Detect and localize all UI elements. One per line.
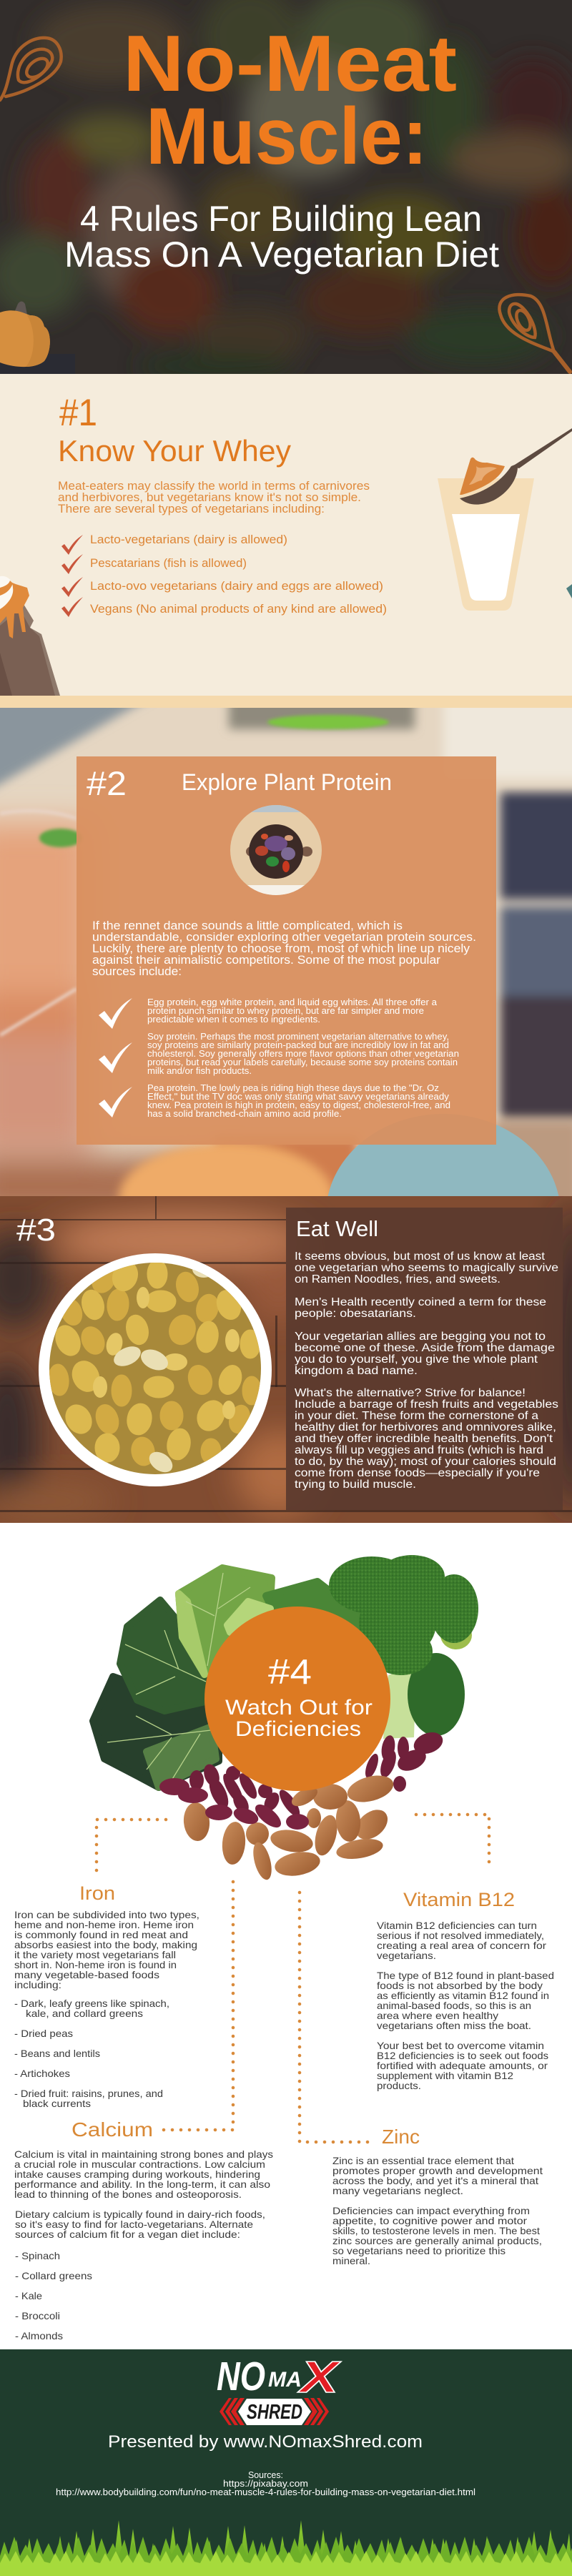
protein sources list: Effect," but the TV doc was only stating what savvy vegetarians already xyxy=(147,1091,450,1102)
zinc heading: Zinc xyxy=(382,2126,420,2148)
iron text xyxy=(14,1909,199,2109)
vitamin b12 text: fortified with adequate amounts, or xyxy=(377,2060,548,2071)
zinc text: skills, to testosterone levels in men. The best xyxy=(332,2225,540,2236)
zinc text: many vegetarians neglect. xyxy=(332,2185,463,2196)
sources: http://www.bodybuilding.com/fun/no-meat-muscle-4-rules-for-building-mass-on-vegetarian-diet.html xyxy=(56,2487,475,2497)
food collage xyxy=(93,1555,478,1882)
rule 1 heading: Know Your Whey xyxy=(58,434,291,468)
calcium text: performance and ability. In the long-term, it can also xyxy=(14,2178,270,2190)
rule 1 intro text xyxy=(58,480,370,515)
rule 4 number: #4 xyxy=(268,1653,312,1692)
white background xyxy=(0,1523,572,2349)
subtitle xyxy=(64,199,499,275)
vitamin b12 text: B12 deficiencies is to seek out foods xyxy=(377,2050,548,2061)
calcium text: - Collard greens xyxy=(15,2270,92,2281)
rule 4 heading xyxy=(225,1696,373,1741)
rule 3 body text: on Ramen Noodles, fries, and sweets. xyxy=(295,1273,500,1285)
kidney beans xyxy=(189,1729,446,1820)
blue egg xyxy=(327,1125,559,1196)
rule 2 orange panel xyxy=(77,756,496,1145)
zinc text xyxy=(332,2155,543,2266)
red check marks xyxy=(61,535,83,617)
rule 3 heading: Eat Well xyxy=(296,1216,378,1241)
panel: rule 3 eat well xyxy=(0,1196,572,1523)
protein sources list: protein punch similar to whey protein, but are far simpler and more xyxy=(147,1005,424,1016)
calcium text: so it's easy to find for lacto-vegetarians. Alternate xyxy=(15,2219,253,2230)
rule 3 body text: become one of these. Aside from the damage xyxy=(295,1342,555,1354)
rule 3 body text: and they offer incredible health benefits. Don't xyxy=(295,1433,553,1445)
calcium text xyxy=(14,2148,273,2341)
rule 4 heading: Deficiencies xyxy=(235,1717,361,1741)
rule 3 body text: always fill up veggies and fruits (which is hard xyxy=(295,1444,543,1456)
calcium text: Dietary calcium is typically found in dairy-rich foods, xyxy=(15,2209,265,2220)
rule 3 body text: come from dense foods—especially if you're xyxy=(295,1467,540,1479)
iron text: - Beans and lentils xyxy=(14,2048,100,2059)
panel: rule 4 watch out for deficiencies xyxy=(0,1523,572,2349)
rule 1 intro text: There are several types of vegetarians including: xyxy=(58,503,325,515)
title: No-Meat xyxy=(123,19,457,108)
rule 3 body text xyxy=(295,1250,558,1491)
vitamin b12 text: area where even healthy xyxy=(377,2010,498,2021)
rule 2 heading: Explore Plant Protein xyxy=(182,769,392,795)
icon: whisk top left xyxy=(0,38,61,100)
protein sources list: cholesterol. Soy generally offers more flavor options than other vegetarian xyxy=(147,1048,459,1059)
icon: whisk bottom right xyxy=(499,295,570,372)
vitamin b12 text: as efficiently as vitamin B12 found in xyxy=(377,1990,549,2001)
zinc text: so vegetarians need to prioritize this xyxy=(332,2245,506,2256)
calcium text: - Spinach xyxy=(15,2250,60,2261)
protein sources list: has a solid branched-chain amino acid profile. xyxy=(147,1108,342,1119)
icon: glass of milk with spoon xyxy=(438,428,572,611)
leaf fragment xyxy=(39,829,82,847)
nutrient: vitamin b12 xyxy=(377,1889,554,2091)
rule 3 body text: to do, by the way); most of your calories should xyxy=(295,1456,556,1468)
iron text: including: xyxy=(14,1979,61,1990)
iron text: - Artichokes xyxy=(14,2068,70,2079)
kidney beans front xyxy=(159,1778,309,1832)
panel: rule 1 know your whey xyxy=(0,374,572,708)
rule 1 intro text: and herbivores, but vegetarians know it's not so simple. xyxy=(58,491,361,504)
icon: teal corner xyxy=(566,584,572,598)
panel: rule 2 explore plant protein xyxy=(0,708,572,1196)
rule 3 body text: one vegetarian who seems to magically survive xyxy=(295,1262,558,1274)
vitamin b12 text: foods is not absorbed by the body xyxy=(377,1980,543,1991)
vitamin b12 text: products. xyxy=(377,2080,421,2091)
iron text: Iron can be subdivided into two types, xyxy=(14,1909,199,1920)
sources: Sources: xyxy=(248,2469,283,2480)
icon: dessert with caramel xyxy=(0,576,60,696)
protein sources list: Egg protein, egg white protein, and liquid egg whites. All three offer a xyxy=(147,997,438,1007)
title xyxy=(123,19,457,181)
rule 2 intro text: Luckily, there are plenty to choose from, most of which line up nicely xyxy=(92,942,470,955)
zinc text: promotes proper growth and development xyxy=(332,2165,543,2176)
rule 1 number: #1 xyxy=(59,392,97,434)
vitamin b12 text xyxy=(377,1920,554,2091)
rule 2 blurred photo background xyxy=(0,708,572,1196)
vegetarian types list: Lacto-ovo vegetarians (dairy and eggs are allowed) xyxy=(90,580,383,593)
calcium text: sources of calcium fit for a vegan diet include: xyxy=(15,2229,240,2240)
vegetarian types list: Pescatarians (fish is allowed) xyxy=(90,557,247,570)
glass rim and highlights xyxy=(0,811,77,1035)
vegetarian types list xyxy=(90,533,387,616)
iron text: black currents xyxy=(23,2098,91,2109)
rule 3 body text: Men's Health recently coined a term for these xyxy=(295,1296,546,1308)
protein sources list: Soy protein. Perhaps the most prominent vegetarian alternative to whey, xyxy=(147,1031,449,1042)
rule 1 intro text: Meat-eaters may classify the world in terms of carnivores xyxy=(58,480,370,493)
rule 3 body text: you do to yourself, you give the whole plant xyxy=(295,1353,538,1366)
sources xyxy=(56,2469,475,2497)
title: Muscle: xyxy=(146,92,428,181)
nutrient: zinc xyxy=(332,2126,543,2266)
protein sources list: knew. Pea protein is high in protein, easy to digest, cholesterol-free, and xyxy=(147,1100,450,1110)
rule 1 bottom band xyxy=(0,696,572,708)
rule 3 body text: kingdom a bad name. xyxy=(295,1365,418,1377)
rule 4 heading: Watch Out for xyxy=(225,1696,373,1719)
subtitle: Mass On A Vegetarian Diet xyxy=(64,235,499,275)
rule 3 body text: people: obesatarians. xyxy=(295,1308,416,1320)
green juice highlight xyxy=(267,715,389,729)
calcium text: - Almonds xyxy=(15,2330,63,2341)
nutrient: calcium xyxy=(14,2118,273,2341)
iron text: it the variety most vegetarians fall xyxy=(14,1949,176,1960)
vitamin b12 text: Your best bet to overcome vitamin xyxy=(377,2040,544,2051)
vitamin b12 text: creating a real area of concern for xyxy=(377,1940,546,1951)
rule 3 body text: Include a barrage of fresh fruits and vegetables xyxy=(295,1398,558,1411)
vitamin b12 text: vegetarians often miss the boat. xyxy=(377,2020,531,2031)
zinc text: appetite, to cognitive power and motor xyxy=(332,2215,527,2226)
presented by: Presented by www.NOmaxShred.com xyxy=(108,2432,423,2452)
vitamin b12 text: serious if not resolved immediately, xyxy=(377,1930,544,1941)
protein sources list: milk and/or fish products. xyxy=(147,1065,252,1076)
almonds xyxy=(182,1771,396,1882)
zinc text: mineral. xyxy=(332,2255,370,2266)
rule 2 intro text: against their animalistic competitors. Some of the most popular xyxy=(92,954,441,967)
logo: no max shred: MA xyxy=(268,2368,302,2392)
broccoli xyxy=(329,1555,478,1739)
vitamin b12 text: animal-based foods, so this is an xyxy=(377,2000,531,2011)
footer background xyxy=(0,2349,572,2576)
calcium text: a crucial role in muscular contractions. Low calcium xyxy=(14,2158,265,2170)
zinc text: Zinc is an essential trace element that xyxy=(332,2155,514,2166)
vegetarian types list: Lacto-vegetarians (dairy is allowed) xyxy=(90,533,287,546)
calcium text: Calcium is vital in maintaining strong bones and plays xyxy=(14,2148,273,2160)
bean photo in white frame xyxy=(39,1253,272,1486)
iron text: is commonly found in red meat and xyxy=(14,1929,188,1940)
rule 3 number: #3 xyxy=(16,1213,56,1248)
rule 3 body text: in your diet. These form the cornerstone of a xyxy=(295,1410,538,1422)
icon: pumpkin xyxy=(0,302,75,374)
iron heading: Iron xyxy=(79,1882,115,1904)
iron text: - Dried fruit: raisins, prunes, and xyxy=(14,2088,163,2099)
rule 3 body text: healthy diet for herbivores and omnivores alike, xyxy=(295,1421,556,1433)
dotted connectors xyxy=(97,1815,489,2142)
rule 3 body text: It seems obvious, but most of us know at least xyxy=(295,1250,546,1263)
white check marks xyxy=(99,998,132,1117)
iron text: many vegetable-based foods xyxy=(14,1969,159,1980)
sources: https://pixabay.com xyxy=(223,2478,308,2489)
zinc text: across the body, and yet it's a mineral that xyxy=(332,2175,538,2186)
subtitle: 4 Rules For Building Lean xyxy=(80,199,482,239)
calcium text: - Broccoli xyxy=(15,2310,60,2321)
logo: no max shred xyxy=(217,2353,342,2425)
vitamin b12 text: The type of B12 found in plant-based xyxy=(377,1970,554,1981)
zinc text: Deficiencies can impact everything from xyxy=(332,2205,530,2216)
iron text: heme and non-heme iron. Heme iron xyxy=(14,1919,194,1930)
iron text: - Dark, leafy greens like spinach, xyxy=(14,1998,169,2009)
iron text: short in. Non-heme iron is found in xyxy=(14,1959,177,1970)
iron text: - Dried peas xyxy=(14,2028,73,2039)
rule 3 body text: trying to build muscle. xyxy=(295,1479,416,1491)
vegetarian types list: Vegans (No animal products of any kind are allowed) xyxy=(90,603,387,616)
protein sources list xyxy=(147,997,459,1119)
nutrient: iron xyxy=(14,1882,199,2109)
protein sources list: proteins, but read your labels carefully, because some soy proteins contain xyxy=(147,1057,458,1067)
zinc text: zinc sources are generally animal products, xyxy=(332,2235,542,2246)
salad bowl photo xyxy=(230,805,322,896)
vitamin b12 heading: Vitamin B12 xyxy=(403,1889,515,1910)
hero blurred fruit background xyxy=(0,0,572,379)
grass xyxy=(0,2520,572,2576)
logo: no max shred: SHRED xyxy=(247,2401,302,2424)
iron text: kale, and collard greens xyxy=(26,2008,143,2019)
wood background xyxy=(0,1196,572,1523)
rule 3 body text: What's the alternative? Strive for balance! xyxy=(295,1387,526,1399)
vitamin b12 text: Vitamin B12 deficiencies can turn xyxy=(377,1920,537,1931)
iron text: absorbs easiest into the body, making xyxy=(14,1939,197,1950)
orange circle badge xyxy=(204,1607,390,1791)
rule 2 intro text: understandable, consider exploring other vegetarian protein sources. xyxy=(92,931,476,944)
calcium text: - Kale xyxy=(15,2290,42,2301)
rule 2 number: #2 xyxy=(87,764,127,802)
rule 3 body text: Your vegetarian allies are begging you not to xyxy=(295,1331,546,1343)
vitamin b12 text: supplement with vitamin B12 xyxy=(377,2070,513,2081)
rule 2 intro text xyxy=(92,919,476,978)
protein sources list: Pea protein. The lowly pea is riding high these days due to the "Dr. Oz xyxy=(147,1082,439,1093)
calcium text: intake causes cramping during workouts, hindering xyxy=(14,2168,260,2180)
calcium heading: Calcium xyxy=(72,2118,153,2141)
calcium text: lead to thinning of the bones and osteoporosis. xyxy=(14,2188,242,2200)
logo: no max shred: X xyxy=(297,2353,342,2402)
vitamin b12 text: vegetarians. xyxy=(377,1950,436,1961)
rule 1 background xyxy=(0,374,572,696)
cabbage leaves xyxy=(93,1568,365,1787)
hero section xyxy=(0,0,572,379)
rule 2 intro text: If the rennet dance sounds a little complicated, which is xyxy=(92,919,403,932)
footer xyxy=(0,2349,572,2576)
rule 2 intro text: sources include: xyxy=(92,965,182,978)
rule 3 brown text panel xyxy=(286,1208,563,1510)
protein sources list: soy proteins are similarly protein-packed but are incredibly low in fat and xyxy=(147,1040,449,1050)
protein sources list: predictable when it comes to ingredients. xyxy=(147,1014,320,1025)
logo: no max shred: NO xyxy=(217,2354,265,2399)
